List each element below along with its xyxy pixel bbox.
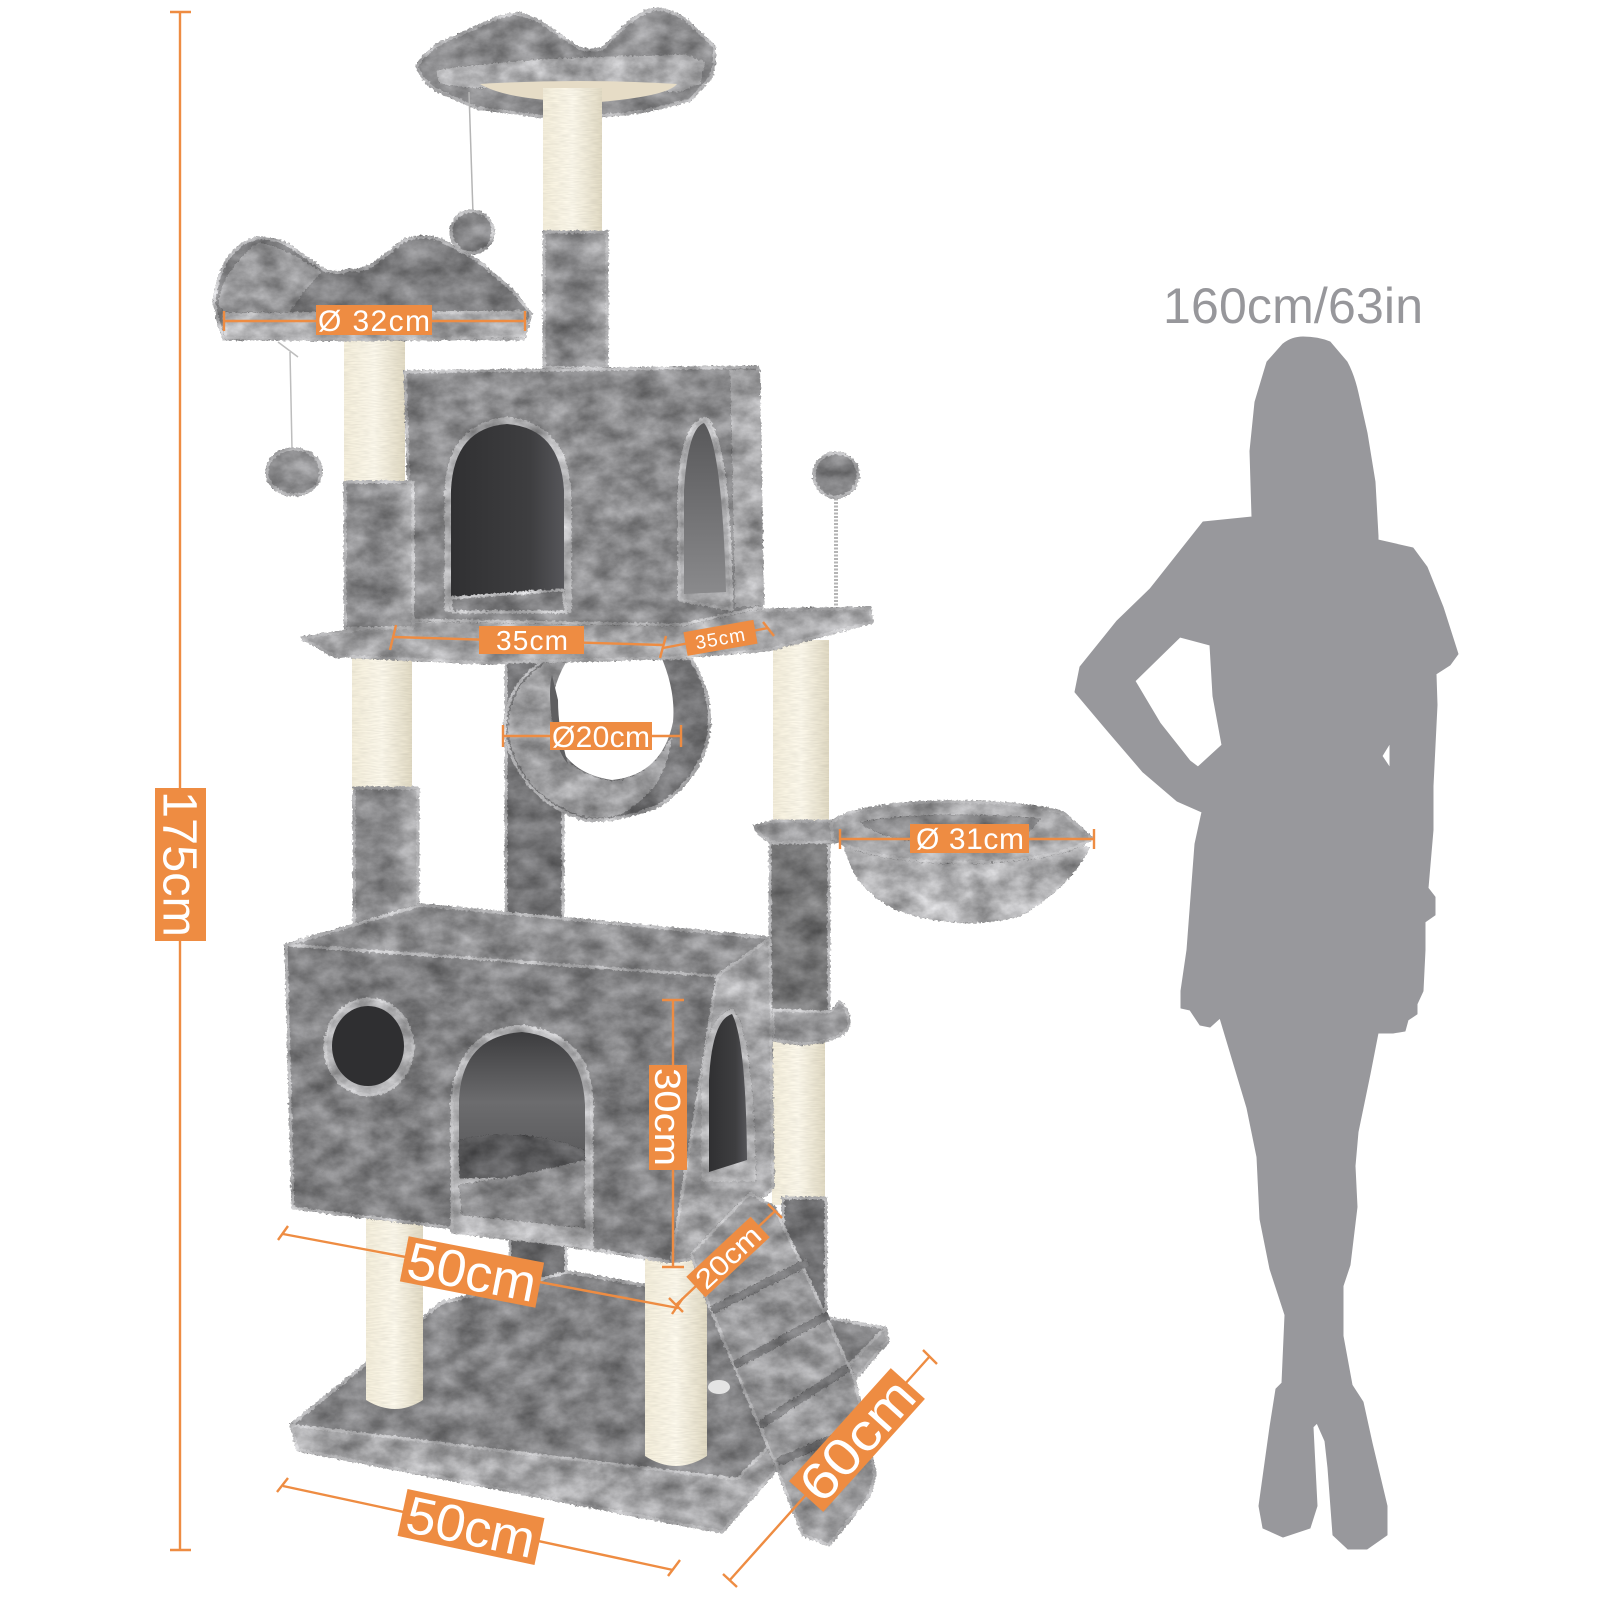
round window rim — [325, 999, 413, 1095]
dimension 30cm: 30cm — [647, 1068, 688, 1166]
lower house side — [671, 938, 773, 1262]
dimension 35cm front — [390, 625, 666, 658]
dimension Ø 31cm: Ø 31cm — [916, 823, 1024, 856]
dimension 50cm lower — [277, 1478, 680, 1576]
arch rim — [452, 1026, 592, 1248]
dimension 30cm — [647, 1000, 688, 1267]
arch floor shadow — [459, 1134, 585, 1178]
base front edges — [291, 1328, 888, 1532]
paw decoration — [708, 1380, 730, 1394]
arch 1 rim — [446, 418, 570, 612]
central post behind tunnel — [506, 660, 566, 1307]
mid platform — [302, 608, 872, 663]
right post bottom fur — [783, 1198, 826, 1328]
dimension Ø 32cm: Ø 32cm — [318, 305, 430, 338]
tunnel outer — [505, 658, 709, 820]
dimension 60cm: 60cm — [788, 1368, 927, 1514]
second perch — [214, 237, 531, 340]
right post lower sisal — [772, 1040, 825, 1205]
left post lower sisal — [352, 656, 412, 790]
hammock rim — [832, 802, 1092, 862]
base board — [291, 1272, 888, 1532]
dimension 50cm upper: 50cm — [402, 1232, 541, 1314]
top perch beige underside — [480, 81, 677, 102]
dimension 35cm front: 35cm — [496, 625, 568, 656]
tunnel hole — [552, 654, 673, 780]
arch 2 rim — [679, 418, 732, 610]
lower house — [286, 905, 773, 1262]
dimension 35cm side: 35cm — [694, 625, 747, 654]
dimension Ø20cm: Ø20cm — [552, 721, 650, 754]
hanging string 1 — [469, 92, 473, 214]
base top — [291, 1272, 885, 1479]
dimension Ø20cm — [503, 721, 681, 754]
height dimension line 175cm — [152, 12, 206, 1550]
dimension 20cm ramp — [669, 1204, 782, 1312]
dimension Ø 32cm — [224, 305, 525, 338]
hammock inner — [860, 815, 1040, 846]
ramp steps — [712, 1262, 864, 1462]
label 175cm: 175cm — [152, 791, 206, 937]
arch opening — [459, 1032, 585, 1160]
second perch rim — [224, 312, 525, 340]
ramp board — [691, 1193, 875, 1545]
arch floor — [459, 1160, 585, 1228]
tunnel — [505, 654, 709, 820]
ramp — [691, 1193, 875, 1545]
tunnel front ring — [508, 660, 672, 818]
upper house body — [405, 367, 762, 625]
dimension 60cm — [723, 1350, 937, 1587]
dimension 50cm lower: 50cm — [401, 1486, 540, 1570]
arch 2 opening — [684, 423, 726, 594]
spring toy ball — [814, 453, 858, 497]
side arch opening — [709, 1014, 747, 1172]
cat tree illustration — [214, 9, 1092, 1545]
right post fur — [770, 822, 829, 1022]
pom-pom ball 1 — [451, 211, 493, 253]
spring toy spring — [834, 495, 838, 607]
top perch dish — [417, 9, 715, 117]
dimension 20cm ramp: 20cm — [689, 1219, 767, 1295]
upper left post sisal — [344, 339, 405, 484]
person silhouette — [1075, 337, 1458, 1549]
person height label: 160cm/63in — [1163, 278, 1423, 334]
lower house roof — [286, 905, 770, 976]
pom-pom ball 2 — [267, 449, 321, 495]
tunnel inner shade — [550, 675, 568, 764]
hook and string 2 — [278, 342, 298, 449]
ring around right post — [773, 1002, 849, 1044]
upper house — [405, 367, 764, 625]
side arch rim — [703, 1010, 755, 1180]
top post sisal overlap — [543, 88, 602, 148]
top post fur section — [544, 232, 607, 368]
left post lower fur — [354, 788, 418, 936]
arch 1 opening — [451, 424, 564, 597]
hammock shelf — [755, 821, 850, 843]
right leg sisal — [645, 1255, 707, 1466]
upper left post fur — [345, 482, 413, 628]
right post upper sisal — [773, 640, 829, 825]
left leg sisal — [366, 1218, 423, 1409]
upper house right rim light — [730, 370, 764, 608]
second perch left highlight — [218, 242, 322, 312]
arch 1 floor — [450, 590, 566, 612]
top perch — [417, 9, 715, 117]
top post sisal section — [543, 88, 602, 236]
dimension 35cm side — [663, 620, 774, 656]
hammock bowl — [845, 845, 1088, 921]
second perch dish — [214, 237, 531, 339]
hammock — [755, 802, 1092, 921]
round window opening — [332, 1006, 404, 1086]
top perch rim — [436, 54, 705, 92]
dimension 50cm upper — [278, 1226, 683, 1315]
dimension Ø 31cm — [840, 823, 1094, 856]
lower house front — [286, 945, 717, 1262]
